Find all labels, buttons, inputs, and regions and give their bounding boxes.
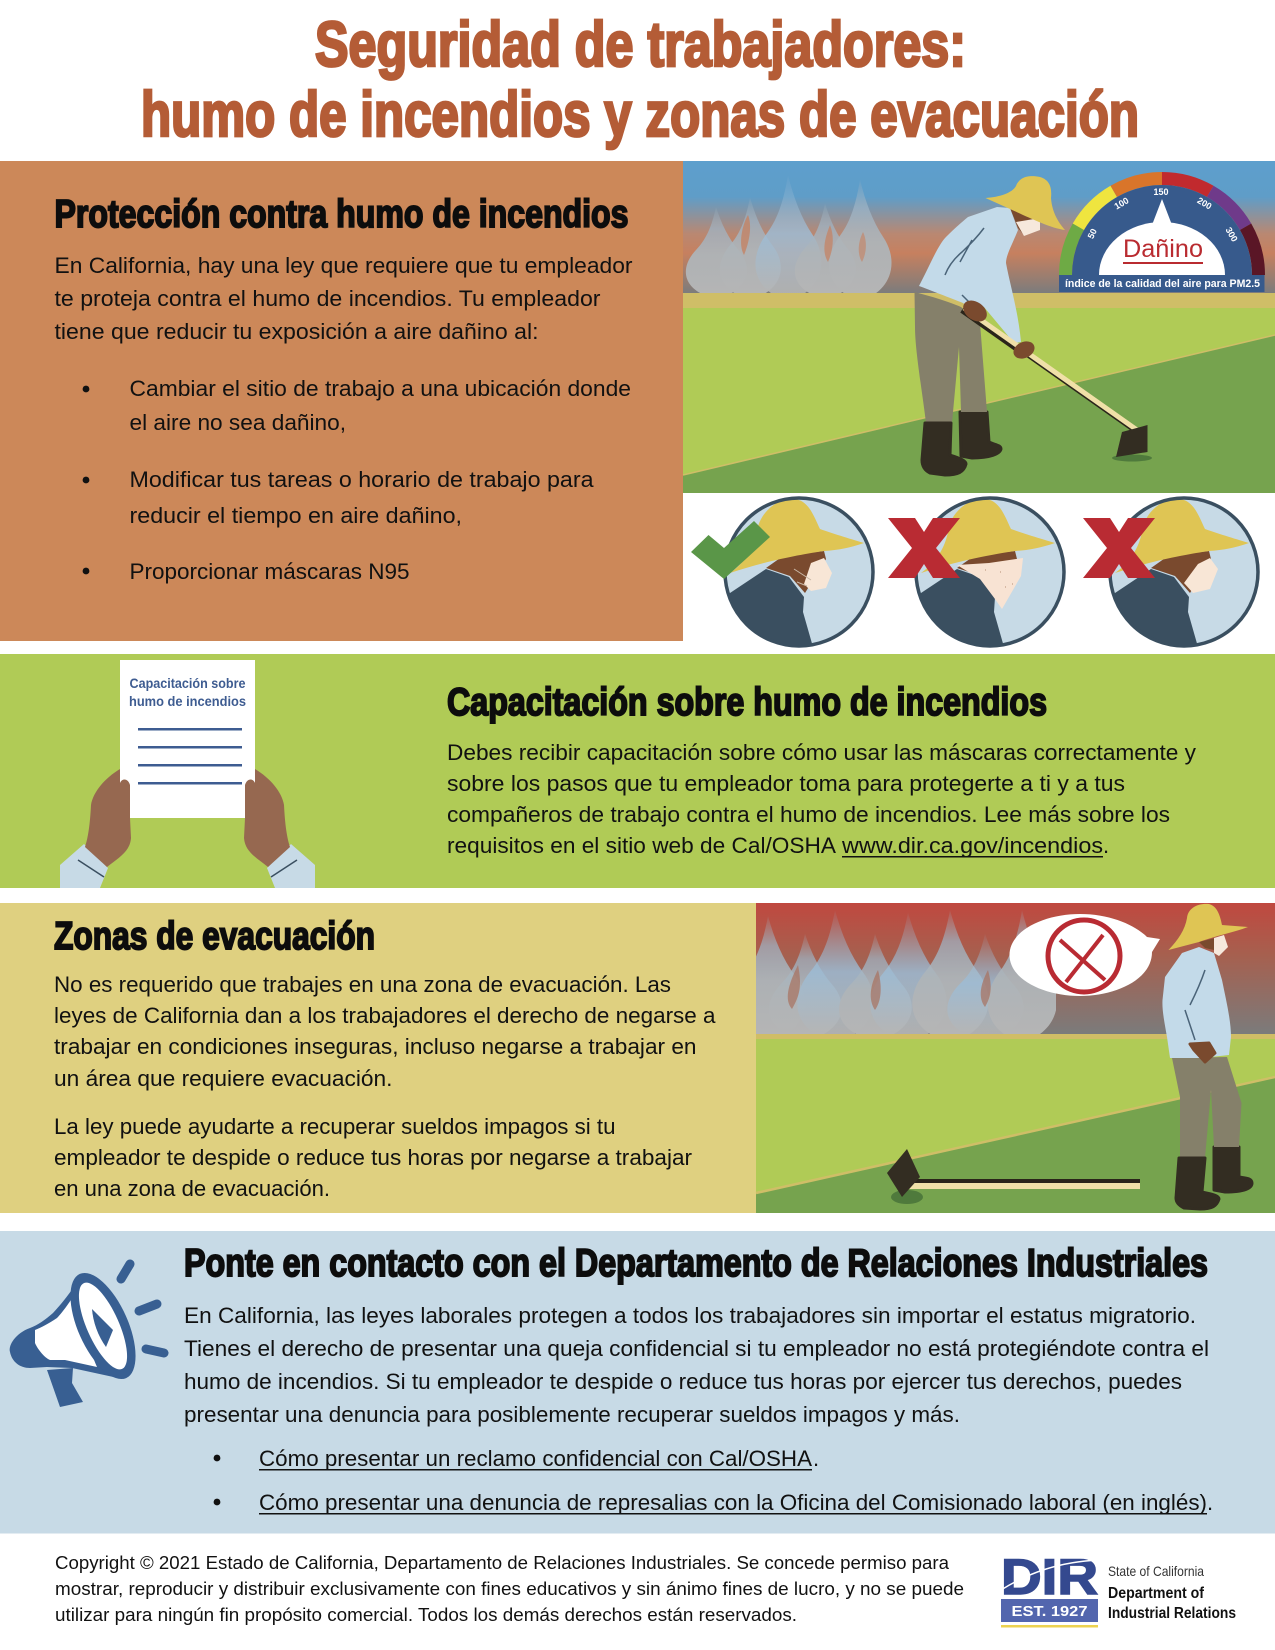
text block: capacitación: sobre los pasos que tu empleador toma para protegerte a ti y a tus <box>447 771 1125 796</box>
heading: protección: Protección contra humo de incendios <box>54 193 628 236</box>
mask: wrong bandana <box>888 498 1064 652</box>
illustration: farm worker hoeing in smoke <box>683 161 1275 493</box>
icon: check mark <box>691 521 770 579</box>
link list: Cómo presentar un reclamo confidencial con Cal/OSHA <box>259 1446 812 1471</box>
heading: zonas: Zonas de evacuación <box>54 915 375 958</box>
panel: zonas de evacuación <box>0 903 756 1213</box>
text block: contacto <box>184 1303 1209 1427</box>
AQI gauge: 150 <box>1153 187 1169 197</box>
panel: capacitación sobre humo de incendios <box>0 654 1275 888</box>
text block: capacitación <box>447 740 1196 858</box>
icon: megaphone <box>10 1264 164 1407</box>
smoke flames <box>686 175 892 293</box>
mask examples row <box>684 493 1275 652</box>
text block: derecho a negarse: leyes de California dan a los trabajadores el derecho de negarse a <box>54 1003 716 1028</box>
text block: derecho a negarse: un área que requiere evacuación. <box>54 1066 392 1091</box>
logo: DIR: State of California <box>1108 1563 1204 1579</box>
title <box>141 10 1139 150</box>
logo: DIR: Department of <box>1108 1585 1205 1602</box>
text block: capacitación: . <box>1103 833 1109 858</box>
logo: DIR: DIR <box>1001 1549 1098 1605</box>
AQI gauge: 100 <box>1112 195 1131 211</box>
worker figure <box>914 176 1152 475</box>
smoke flames <box>732 910 1057 1034</box>
standing worker <box>1162 904 1252 1209</box>
text block: intro <box>54 253 632 344</box>
text block: derecho a negarse <box>54 972 716 1091</box>
text block: capacitación: www.dir.ca.gov/incendios <box>841 833 1103 858</box>
link list: . <box>1207 1490 1213 1515</box>
text block: intro: te proteja contra el humo de incendios. Tu empleador <box>54 286 600 311</box>
text block: sueldos impagos <box>54 1114 692 1201</box>
hoe on ground <box>887 1149 1140 1204</box>
AQI gauge: 200 <box>1195 195 1214 211</box>
bullet list: acciones del empleador: el aire no sea dañino, <box>130 410 346 435</box>
mask: correct N95 <box>691 498 873 652</box>
document: Capacitación sobre <box>130 676 246 691</box>
bullet list: acciones del empleador: Cambiar el sitio de trabajo a una ubicación donde <box>130 376 631 401</box>
logo: DIR: Industrial Relations <box>1108 1605 1236 1622</box>
panel: contacto <box>0 1231 1275 1534</box>
text block: capacitación: Debes recibir capacitación sobre cómo usar las máscaras correctamente y <box>447 740 1196 765</box>
text block: intro: tiene que reducir tu exposición a aire dañino al: <box>54 319 538 344</box>
panel: protección contra humo de incendios <box>0 161 683 641</box>
text block: sueldos impagos: empleador te despide o reduce tus horas por negarse a trabajar <box>54 1145 692 1170</box>
document: humo de incendios <box>129 694 246 709</box>
link list: Cómo presentar una denuncia de represalias con la Oficina del Comisionado laboral (en inglés) <box>259 1490 1207 1515</box>
bullet list: acciones del empleador: Modificar tus tareas o horario de trabajo para <box>130 467 594 492</box>
logo: DIR: EST. 1927 <box>1012 1603 1088 1620</box>
AQI gauge: 300 <box>1224 225 1240 244</box>
heading: capacitación: Capacitación sobre humo de incendios <box>447 681 1047 724</box>
illustration: worker refusing to work near fire <box>732 903 1275 1213</box>
text block: capacitación: compañeros de trabajo contra el humo de incendios. Lee más sobre los <box>447 802 1170 827</box>
bullet list: acciones del empleador <box>83 376 631 584</box>
AQI gauge: Dañino <box>1123 235 1203 263</box>
icon: hands holding document <box>60 660 315 888</box>
AQI gauge: 50 <box>1086 227 1099 240</box>
text block: sueldos impagos: en una zona de evacuación. <box>54 1176 330 1201</box>
logo: DIR <box>1001 1549 1236 1628</box>
mask: wrong surgical mask <box>1083 498 1258 652</box>
title: Seguridad de trabajadores: <box>315 10 966 80</box>
text block: sueldos impagos: La ley puede ayudarte a recuperar sueldos impagos si tu <box>54 1114 616 1139</box>
AQI gauge <box>1059 178 1264 292</box>
hoe <box>962 308 1152 462</box>
footer copyright: mostrar, reproducir y distribuir exclusivamente con fines educativos y sin ánimo fines de lucro, y no se puede <box>55 1579 964 1599</box>
right hand <box>244 769 315 888</box>
text block: contacto: humo de incendios. Si tu empleador te despide o reduce tus horas por ejercer tus derechos, puedes <box>184 1369 1182 1394</box>
bullet list: acciones del empleador: reducir el tiempo en aire dañino, <box>130 503 462 528</box>
text block: derecho a negarse: No es requerido que trabajes en una zona de evacuación. Las <box>54 972 671 997</box>
document <box>120 660 255 818</box>
left hand <box>60 769 131 888</box>
link list <box>214 1446 1213 1515</box>
text block: contacto: presentar una denuncia para posiblemente recuperar sueldos impagos y más. <box>184 1402 960 1427</box>
AQI gauge: índice de la calidad del aire para PM2.5 <box>1065 278 1260 290</box>
link list: . <box>813 1446 819 1471</box>
footer copyright: Copyright © 2021 Estado de California, Departamento de Relaciones Industriales. Se concede permiso para <box>55 1553 950 1573</box>
text block: capacitación: requisitos en el sitio web de Cal/OSHA <box>447 833 836 858</box>
bullet list: acciones del empleador: Proporcionar máscaras N95 <box>130 559 410 584</box>
text block: intro: En California, hay una ley que requiere que tu empleador <box>54 253 632 278</box>
footer copyright: utilizar para ningún fin propósito comercial. Todos los demás derechos están reservados. <box>55 1605 797 1625</box>
icon: red X <box>888 518 960 578</box>
text block: contacto: Tienes el derecho de presentar una queja confidencial si tu empleador no está protegiéndote contra el <box>184 1336 1209 1361</box>
text block: contacto: En California, las leyes laborales protegen a todos los trabajadores sin importar el estatus migratorio. <box>184 1303 1196 1328</box>
speech bubble with prohibition icon <box>1010 914 1160 996</box>
text block: derecho a negarse: trabajar en condiciones inseguras, incluso negarse a trabajar en <box>54 1034 696 1059</box>
footer copyright <box>55 1553 964 1625</box>
icon: red X <box>1083 518 1155 578</box>
